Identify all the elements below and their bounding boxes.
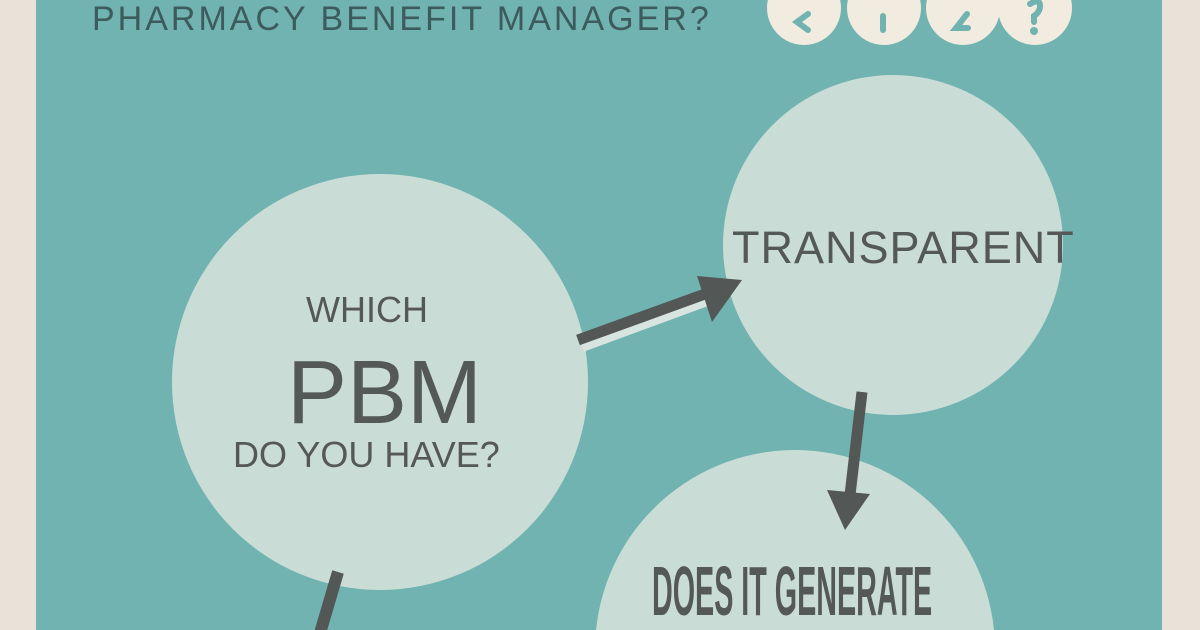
text: do you have: DO YOU HAVE? xyxy=(233,434,500,475)
circle: which PBM xyxy=(172,174,588,590)
icons: quiz circles xyxy=(767,0,1072,45)
arrow: down to generate xyxy=(827,392,870,530)
circle: does it generate xyxy=(595,450,995,630)
text: transparent: TRANSPARENT xyxy=(732,222,1075,273)
text: PBM: PBM xyxy=(287,343,482,443)
text: DOES IT GENERATE xyxy=(652,552,932,630)
circle: transparent xyxy=(723,75,1063,415)
title: PHARMACY BENEFIT MANAGER? xyxy=(92,0,712,38)
arrow: down left xyxy=(318,572,338,630)
text: which: WHICH xyxy=(306,289,428,330)
arrow: to transparent xyxy=(578,276,742,346)
